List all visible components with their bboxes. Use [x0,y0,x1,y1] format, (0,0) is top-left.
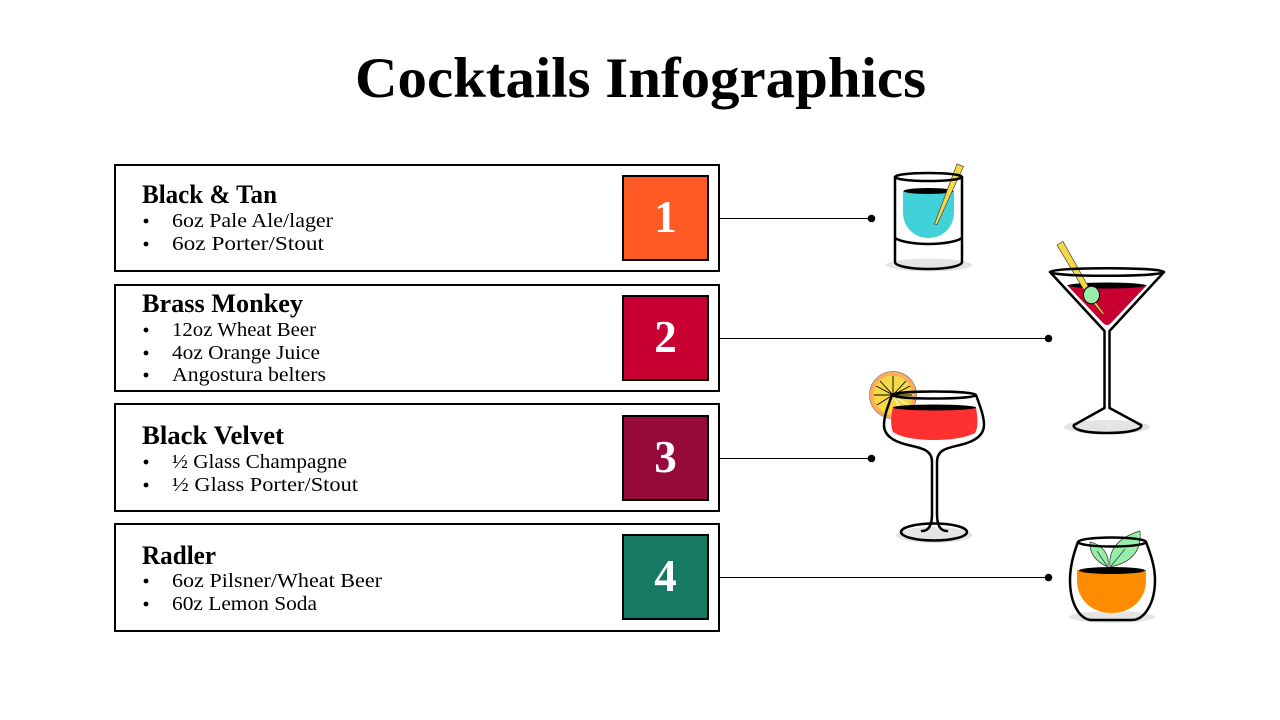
ingredients list [144,319,326,386]
heading: Brass Monkey: Brass Monkey [142,289,303,318]
ingredients list: 6oz Pale Ale/lager [172,210,333,232]
heading: Black & Tan: Black & Tan [142,180,278,209]
icon: coupe glass with lemon slice [870,372,984,543]
ingredients list [144,570,382,615]
icon: martini glass with red drink [1050,242,1164,434]
panel: Black & Tan [115,165,719,271]
icon: tumbler with orange drink and leaves [1069,531,1155,623]
connector 4 [719,574,1052,581]
number badge 4 [623,535,708,619]
connector 3 [719,455,875,462]
number badge 4: 4 [654,551,677,601]
title: Cocktails Infographics [355,47,926,110]
panel: Radler [115,524,719,631]
number badge 3 [623,416,708,500]
number badge 2 [623,296,708,380]
ingredients list: ½ Glass Champagne [172,451,347,473]
heading: Radler: Radler [142,541,216,570]
number badge 2: 2 [654,312,677,362]
number badge 3: 3 [654,432,677,482]
leaves [1090,531,1140,567]
panel: Brass Monkey [115,285,719,391]
number badge 1: 1 [654,192,677,242]
ingredients list: 4oz Orange Juice [172,342,320,364]
panel: Black Velvet [115,404,719,511]
icon: shot glass with teal drink [886,164,972,272]
ingredients list [144,210,333,255]
ingredients list: ½ Glass Porter/Stout [172,474,358,496]
connector 1 [719,215,875,222]
heading: Black Velvet: Black Velvet [142,421,284,450]
number badge 1 [623,176,708,260]
ingredients list: 6oz Porter/Stout [172,233,324,255]
ingredients list: 60z Lemon Soda [172,593,317,615]
lemon slice [870,372,916,418]
ingredients list [144,451,358,496]
ingredients list: 6oz Pilsner/Wheat Beer [172,570,382,592]
ingredients list: 12oz Wheat Beer [172,319,316,341]
ingredients list: Angostura belters [172,364,326,386]
connector 2 [719,335,1052,342]
